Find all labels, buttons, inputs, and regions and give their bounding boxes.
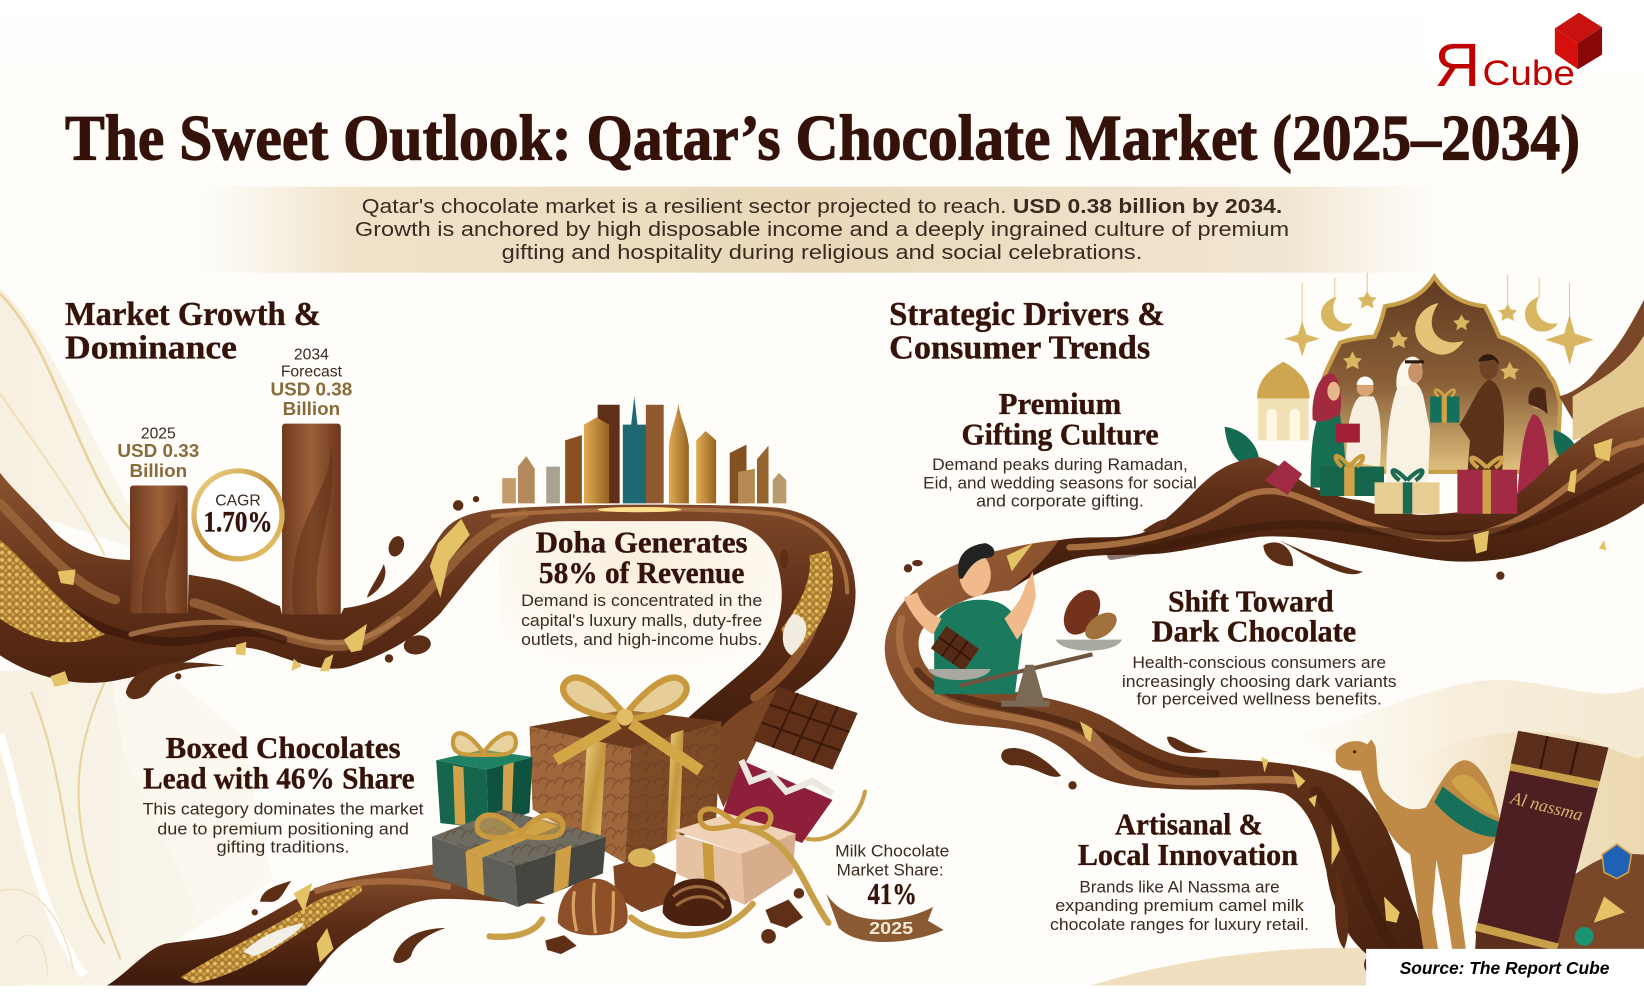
camel (1336, 739, 1504, 952)
Al Nassma chocolate bar (1475, 731, 1608, 953)
man in white thobe (1386, 357, 1430, 482)
gold glow (598, 507, 682, 512)
panel: Doha revenue: Doha Generates (536, 526, 748, 560)
red wrapper (722, 760, 832, 843)
panel: strategic heading (889, 296, 1165, 367)
truffle 1 (558, 879, 628, 935)
panel: boxed chocolates: This category dominates the market (143, 801, 424, 819)
CAGR badge: 1.70% (203, 507, 273, 539)
chocolate bar (753, 687, 858, 770)
panel: premium gifting: Demand peaks during Ramadan, (932, 456, 1188, 474)
green gift box (436, 733, 533, 828)
panel: boxed chocolates: Boxed Chocolates (166, 731, 401, 765)
panel: Doha revenue: capital's luxury malls, duty-free (521, 612, 762, 630)
girl in red (1517, 387, 1550, 496)
panel: artisanal innovation: Local Innovation (1078, 838, 1298, 872)
scale (928, 640, 1122, 707)
gold ribbon curls (490, 792, 865, 937)
skyline (502, 396, 786, 503)
saddle (1434, 786, 1504, 837)
milk chocolate share callout: 41% (868, 877, 917, 911)
panel: premium gifting (923, 387, 1197, 510)
small cube chocolate (613, 848, 676, 912)
source box (1366, 949, 1644, 993)
panel: artisanal innovation: chocolate ranges for luxury retail. (1050, 916, 1309, 934)
intro text: Qatar's chocolate market is a resilient sector projected to reach. USD 0.38 billion by 2034. (362, 195, 1282, 218)
chocolate in hand (931, 626, 979, 671)
festive arch (1318, 277, 1560, 472)
panel: market growth heading: Market Growth & (65, 296, 321, 333)
ribbon highlights (0, 503, 847, 697)
bar 2034 (282, 424, 341, 623)
gems (1575, 844, 1631, 946)
panel: shift toward dark chocolate (1122, 584, 1397, 709)
panel: shift toward dark chocolate: for perceived wellness benefits. (1137, 691, 1382, 709)
gold flakes swirl (1007, 543, 1400, 923)
bar chart bars behind ribbon (130, 424, 341, 623)
logo letter: Я (1434, 31, 1480, 99)
panel: artisanal innovation (1050, 808, 1309, 934)
label 2034: Billion (283, 398, 340, 419)
drips lower (175, 673, 446, 963)
hanging moons and stars (1284, 273, 1594, 365)
milk chocolate share callout: Milk Chocolate (835, 843, 949, 861)
label 2025: Billion (130, 460, 187, 481)
large bow (563, 678, 687, 719)
shirt (934, 600, 1022, 694)
panel: Doha revenue (521, 526, 762, 649)
intro text: Growth is anchored by high disposable income and a deeply ingrained culture of premium (355, 218, 1289, 241)
panel: boxed chocolates: Lead with 46% Share (143, 761, 415, 795)
panel: shift toward dark chocolate: increasingly choosing dark variants (1122, 673, 1397, 691)
milk chocolate share callout (826, 843, 949, 942)
panel: Doha revenue: outlets, and high-income hubs. (521, 631, 762, 649)
label 2025: 2025 (141, 425, 176, 442)
leaves (1225, 376, 1615, 472)
gold flakes right (1473, 438, 1613, 554)
intro text (355, 195, 1289, 264)
panel: boxed chocolates (143, 731, 424, 856)
truffle 2 (663, 879, 732, 926)
label 2034: 2034 (294, 347, 329, 364)
CAGR badge (194, 471, 282, 559)
panel: shift toward dark chocolate: Shift Toward (1168, 584, 1334, 618)
decorative cream silk: lower left (0, 671, 273, 986)
woman in green (1311, 373, 1346, 488)
Al Nassma chocolate bar: Al nassma (1508, 787, 1585, 825)
panel: artisanal innovation: expanding premium camel milk (1055, 897, 1305, 915)
label 2034 (271, 347, 352, 419)
panel: strategic heading: Strategic Drivers & (889, 296, 1165, 333)
milk chocolate share callout: Market Share: (837, 862, 944, 880)
grey patterned gift box (432, 809, 606, 907)
cocoa pods (1056, 584, 1122, 645)
decorative cream silk: upper left (0, 288, 168, 561)
label 2034: Forecast (281, 363, 343, 380)
mosque dome (1257, 362, 1310, 440)
logo (1426, 0, 1644, 99)
panel: premium gifting: Gifting Culture (961, 418, 1159, 452)
head (959, 553, 991, 597)
logo cube (1555, 13, 1602, 69)
green gift handover (1430, 390, 1459, 423)
gold crumbs right (781, 550, 833, 655)
bar labels and CAGR (117, 347, 352, 559)
panel: boxed chocolates: gifting traditions. (217, 838, 350, 856)
drips above (1143, 519, 1505, 580)
panel: Doha revenue: Demand is concentrated in the (521, 592, 762, 610)
gift pile (432, 678, 865, 954)
intro text: gifting and hospitality during religious and social celebrations. (502, 241, 1142, 264)
panel: premium gifting: Eid, and wedding seasons for social (923, 475, 1197, 493)
arch moon (1415, 303, 1464, 355)
chocolate chips (545, 888, 804, 954)
right flow of Doha ribbon behind boxes (702, 687, 781, 807)
panel: artisanal innovation: Brands like Al Nassma are (1079, 878, 1280, 896)
panel: Doha revenue: 58% of Revenue (539, 556, 744, 590)
panel: strategic heading: Consumer Trends (889, 330, 1150, 367)
label 2034: USD 0.38 (271, 378, 352, 399)
drips left (126, 496, 788, 699)
source box: Source: The Report Cube (1400, 958, 1609, 978)
left chocolate ribbon (0, 473, 856, 755)
person with scale (904, 543, 1122, 707)
family figures (1311, 354, 1550, 496)
milk chocolate share callout: 2025 (869, 918, 913, 938)
gold flakes (50, 519, 470, 687)
lower right chocolate (1489, 854, 1644, 949)
drips swirl (904, 560, 1372, 972)
label 2025: USD 0.33 (117, 440, 199, 461)
panel: market growth heading (65, 296, 321, 367)
lower chocolate ribbon (107, 673, 545, 986)
swirl chocolate ribbon (885, 519, 1505, 972)
upper right chocolate ribbon (999, 300, 1644, 590)
bar 2025 (130, 485, 188, 622)
white footer strip (0, 986, 1644, 993)
Doha panel tint (498, 521, 781, 671)
crumb seam (180, 883, 362, 984)
beige gift box (674, 809, 796, 905)
large gift box (529, 678, 721, 863)
child in white (1336, 376, 1381, 467)
panel: shift toward dark chocolate: Dark Chocolate (1152, 615, 1356, 649)
man in brown (1459, 354, 1504, 495)
panel: premium gifting: and corporate gifting. (976, 492, 1144, 510)
panel: premium gifting: Premium (999, 387, 1121, 421)
panel: boxed chocolates: due to premium positioning and (157, 821, 409, 839)
panel: artisanal innovation: Artisanal & (1115, 808, 1263, 842)
intro band (199, 187, 1436, 273)
gold crumbs left (0, 540, 105, 642)
ribbon banner (826, 893, 944, 942)
logo word: Cube (1483, 53, 1575, 93)
panel: shift toward dark chocolate: Health-conscious consumers are (1132, 654, 1386, 672)
gift boxes on ribbon (1264, 456, 1517, 514)
CAGR badge: CAGR (215, 492, 261, 509)
desert dunes right (1090, 680, 1644, 986)
label 2025 (117, 425, 199, 481)
hands (904, 592, 942, 634)
panel: market growth heading: Dominance (65, 330, 237, 367)
